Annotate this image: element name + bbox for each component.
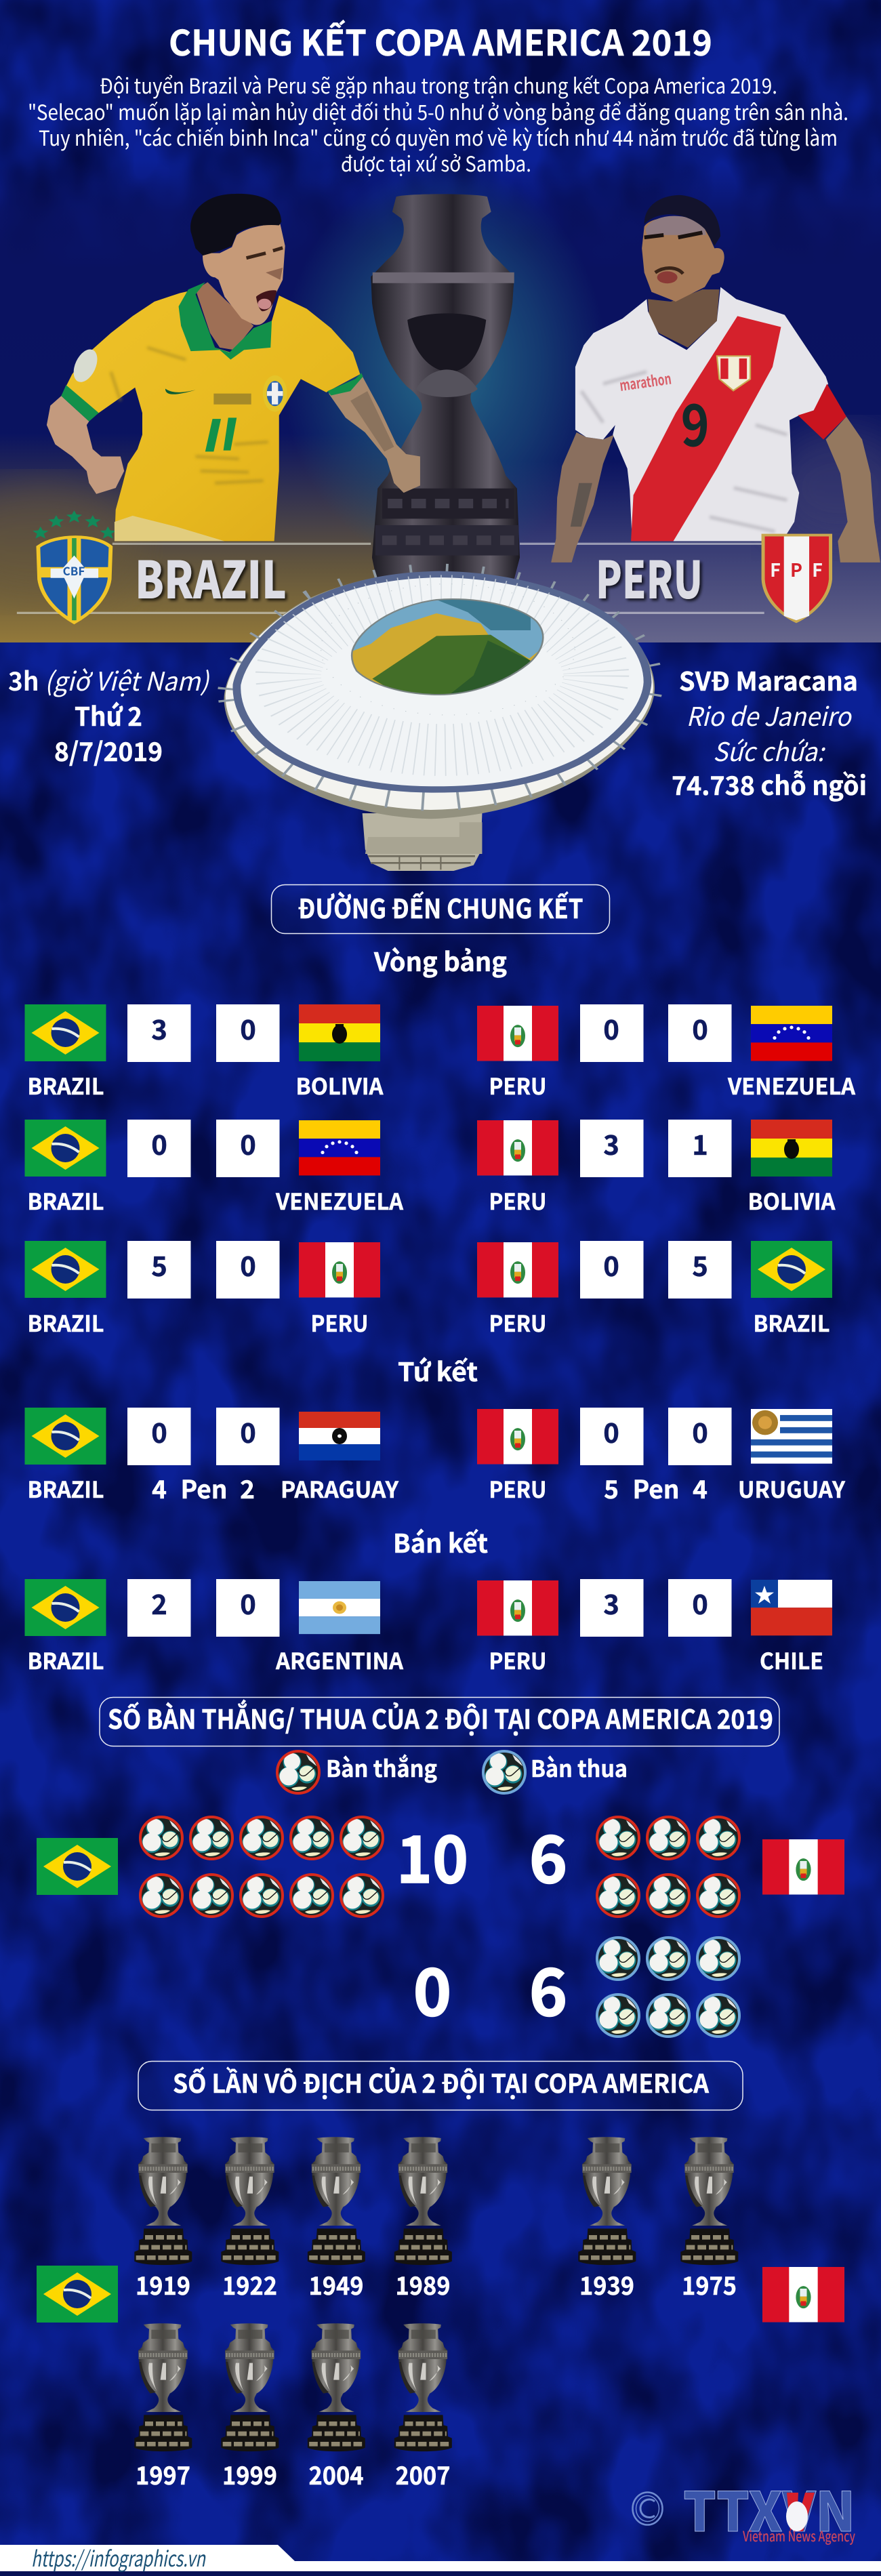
match: Peru 3-0 Chile: CHILE bbox=[760, 1643, 823, 1676]
match: Peru 3-1 Bolivia bbox=[477, 1120, 836, 1217]
match: Brazil 0-0 Venezuela: VENEZUELA bbox=[275, 1184, 404, 1217]
match: Brazil 0-0 Venezuela: 0 bbox=[240, 1124, 256, 1163]
open mouth bbox=[256, 290, 276, 311]
goals scored by Peru bbox=[597, 1817, 739, 1917]
trophy 1939: 1939 bbox=[579, 2266, 634, 2302]
match: Peru 0-0 Venezuela bbox=[477, 1004, 856, 1101]
match: Brazil 5-0 Peru: 0 bbox=[240, 1245, 256, 1284]
trophy 1922 bbox=[221, 2137, 279, 2302]
match: Peru 0-5 Brazil: BRAZIL bbox=[754, 1306, 829, 1338]
flag: Peru goals row bbox=[762, 1839, 844, 1894]
copyright mark bbox=[633, 2493, 663, 2525]
trophy 1949: 1949 bbox=[309, 2266, 363, 2302]
number: Brazil goals scored: 10 bbox=[396, 1807, 468, 1902]
icon: FPF crest bbox=[763, 535, 831, 621]
trophy 2004 bbox=[308, 2323, 365, 2492]
roof radial folds bbox=[288, 584, 596, 750]
footer url: https://infographics.vn bbox=[31, 2542, 206, 2573]
heading: group stage: Vòng bảng bbox=[373, 941, 507, 979]
match: Brazil 3-0 Bolivia: BRAZIL bbox=[27, 1069, 104, 1101]
trophy 1975: 1975 bbox=[682, 2266, 737, 2302]
match: Brazil 0-0 Paraguay, penalties 4-2: 2 bbox=[240, 1469, 255, 1506]
match: Brazil 0-0 Paraguay, penalties 4-2: 0 bbox=[240, 1412, 256, 1451]
flag: Brazil titles bbox=[37, 2266, 118, 2323]
match info: venue: Sức chứa: bbox=[713, 731, 825, 769]
match: Brazil 3-0 Bolivia: 3 bbox=[151, 1008, 167, 1048]
match: Brazil 0-0 Paraguay, penalties 4-2: 0 bbox=[151, 1412, 167, 1451]
trophy 1997: 1997 bbox=[136, 2455, 190, 2492]
match: Peru 0-0 Venezuela: VENEZUELA bbox=[727, 1069, 856, 1101]
stadium facade bbox=[226, 573, 653, 810]
match: Peru 0-5 Brazil: 0 bbox=[603, 1245, 619, 1284]
hero artwork: players and trophy bbox=[0, 0, 881, 642]
jersey bbox=[61, 291, 360, 541]
brows, mouth and moustache bbox=[644, 232, 702, 237]
crest letters: FPF bbox=[770, 556, 823, 582]
heading: semi-finals: Bán kết bbox=[393, 1523, 488, 1560]
legend: goals bbox=[277, 1751, 628, 1793]
goals scored by Brazil bbox=[140, 1817, 383, 1917]
match info: time and date: Thứ 2 bbox=[75, 696, 142, 733]
face bbox=[642, 218, 724, 302]
hero backdrop bbox=[0, 0, 881, 642]
neck bbox=[196, 282, 253, 350]
match: Peru 0-0 Venezuela: 0 bbox=[603, 1008, 619, 1048]
match info: venue: Rio de Janeiro bbox=[686, 696, 853, 733]
number: Brazil goals conceded: 0 bbox=[413, 1940, 451, 2035]
trophy 1919 bbox=[134, 2137, 192, 2302]
trophy 2004: 2004 bbox=[309, 2455, 363, 2492]
match: Brazil 0-0 Paraguay, penalties 4-2: 4 bbox=[152, 1469, 167, 1506]
match: Peru 0-5 Brazil: 5 bbox=[692, 1245, 708, 1284]
icon: Copa America trophy bbox=[371, 194, 520, 579]
TTXVN wordmark: TTXVN bbox=[683, 2469, 855, 2548]
player: Brazil number 11 bbox=[47, 194, 420, 541]
match: Peru 0-5 Brazil: PERU bbox=[489, 1306, 546, 1338]
collar bbox=[179, 282, 272, 360]
left arm bbox=[47, 396, 124, 494]
match: Peru 3-1 Bolivia: 3 bbox=[603, 1124, 619, 1163]
right arm bbox=[329, 377, 420, 493]
match: Peru 3-0 Chile: PERU bbox=[489, 1643, 546, 1676]
central glow behind the trophy bbox=[281, 163, 607, 569]
icon: five green stars bbox=[33, 510, 116, 539]
match: Peru 0-0 Uruguay, penalties 5-4: 0 bbox=[692, 1412, 708, 1451]
logo: TTXVN Vietnam News Agency bbox=[633, 2469, 855, 2548]
trophy 1989: 1989 bbox=[396, 2266, 450, 2302]
face bbox=[203, 224, 285, 325]
crest letters: FPF: F bbox=[770, 556, 781, 582]
match: Brazil 5-0 Peru: 5 bbox=[151, 1245, 167, 1284]
match: Brazil 0-0 Paraguay, penalties 4-2: BRAZIL bbox=[27, 1472, 104, 1505]
player: Peru number 9 bbox=[551, 195, 880, 563]
flag: Brazil goals row bbox=[37, 1838, 118, 1895]
captain armband bbox=[798, 384, 846, 440]
Peru name band bbox=[520, 544, 764, 613]
crest letters: CBF: CBF bbox=[63, 562, 85, 579]
number: Peru goals conceded: 6 bbox=[529, 1940, 567, 2035]
stadium concrete skirt bbox=[224, 571, 655, 819]
jersey number 11 bbox=[205, 417, 237, 451]
match: Peru 3-0 Chile bbox=[477, 1579, 832, 1676]
match info: time and date: 8/7/2019 bbox=[54, 731, 163, 769]
match info: venue: SVĐ Maracana bbox=[679, 661, 858, 698]
seating bowl bbox=[352, 600, 542, 694]
stadium illustration: Maracana bbox=[224, 571, 655, 871]
intro paragraph: được tại xứ sở Samba. bbox=[341, 147, 531, 178]
match: Peru 3-0 Chile: 3 bbox=[603, 1583, 619, 1622]
shorts bbox=[115, 516, 224, 541]
intro paragraph bbox=[28, 69, 848, 178]
match: Peru 3-1 Bolivia: BOLIVIA bbox=[748, 1184, 836, 1217]
match: Brazil 0-0 Venezuela: 0 bbox=[151, 1124, 167, 1163]
match: Brazil 0-0 Paraguay, penalties 4-2 bbox=[24, 1408, 399, 1506]
match: Brazil 2-0 Argentina: BRAZIL bbox=[27, 1643, 104, 1676]
hair bbox=[644, 195, 720, 246]
trophy 1997 bbox=[134, 2323, 192, 2492]
match: Peru 0-0 Uruguay, penalties 5-4 bbox=[477, 1408, 846, 1506]
match: Peru 0-0 Venezuela: PERU bbox=[489, 1069, 546, 1101]
jersey badge bbox=[263, 375, 287, 411]
match info: time and date bbox=[8, 661, 210, 769]
trophy 1975 bbox=[680, 2137, 738, 2302]
match: Peru 0-0 Uruguay, penalties 5-4: URUGUAY bbox=[738, 1472, 846, 1505]
trophy 2007 bbox=[394, 2323, 452, 2492]
match: Peru 0-0 Uruguay, penalties 5-4: 0 bbox=[603, 1412, 619, 1451]
hair bbox=[190, 194, 281, 255]
grey smoke on the Peru side bbox=[447, 427, 881, 642]
match: Brazil 3-0 Bolivia: 0 bbox=[240, 1008, 256, 1048]
icon: CBF crest bbox=[38, 537, 110, 622]
Brazil name band bbox=[17, 510, 371, 622]
match: Peru 0-0 Uruguay, penalties 5-4: PERU bbox=[489, 1472, 546, 1505]
match info: time and date: 3h (giờ Việt Nam) bbox=[8, 661, 210, 698]
match: Brazil 2-0 Argentina bbox=[24, 1579, 404, 1676]
neck bbox=[648, 289, 719, 348]
match: Brazil 3-0 Bolivia: BOLIVIA bbox=[295, 1069, 384, 1101]
chest emblem bbox=[213, 394, 251, 405]
match: Peru 3-0 Chile: 0 bbox=[692, 1583, 708, 1622]
stadium annex bbox=[363, 813, 482, 871]
match: Peru 0-0 Uruguay, penalties 5-4: 4 bbox=[693, 1469, 708, 1506]
match: Brazil 3-0 Bolivia bbox=[24, 1004, 384, 1101]
footer band bbox=[0, 2542, 881, 2576]
match: Brazil 2-0 Argentina: 0 bbox=[240, 1583, 256, 1622]
hero label: BRAZIL: BRAZIL bbox=[135, 539, 287, 613]
match: Peru 3-1 Bolivia: 1 bbox=[692, 1124, 708, 1163]
facade columns bbox=[230, 574, 651, 801]
legend: goals: Bàn thua bbox=[531, 1751, 628, 1784]
match: Brazil 5-0 Peru bbox=[24, 1241, 380, 1338]
heading: road to the final: ĐƯỜNG ĐẾN CHUNG KẾT bbox=[298, 888, 583, 926]
number: Peru goals scored: 6 bbox=[529, 1807, 567, 1902]
jersey number 9: 9 bbox=[681, 380, 710, 464]
blue upper seats bbox=[351, 600, 545, 659]
match: Peru 0-0 Venezuela: 0 bbox=[692, 1008, 708, 1048]
red sash bbox=[631, 316, 781, 541]
jersey shadows bbox=[581, 372, 787, 531]
match: Peru 3-1 Bolivia: PERU bbox=[489, 1184, 546, 1217]
match info: venue: 74.738 chỗ ngồi bbox=[672, 765, 867, 802]
match: Brazil 5-0 Peru: PERU bbox=[310, 1306, 369, 1338]
heading: goals scored and conceded: SỐ BÀN THẮNG/ THUA CỦA 2 ĐỘI TẠI COPA AMERICA 2019 bbox=[108, 1699, 773, 1737]
Peru titles bbox=[578, 2137, 738, 2302]
jersey crest bbox=[717, 356, 750, 390]
match info: venue bbox=[672, 661, 867, 802]
left arm bbox=[551, 432, 614, 563]
legend: goals: Bàn thắng bbox=[326, 1751, 437, 1784]
roof edge panels and white roof bbox=[237, 574, 648, 790]
trophy 1999: 1999 bbox=[222, 2455, 277, 2492]
red V and white globe bbox=[786, 2493, 815, 2531]
intro paragraph: Đội tuyển Brazil và Peru sẽ gặp nhau trong trận chung kết Copa America 2019. bbox=[100, 69, 777, 100]
trophy 1939 bbox=[578, 2137, 636, 2302]
trophy 2007: 2007 bbox=[396, 2455, 450, 2492]
match: Peru 0-0 Uruguay, penalties 5-4: 5 bbox=[604, 1469, 619, 1506]
goals conceded by Peru bbox=[597, 1938, 739, 2037]
gold smoke on the Brazil side bbox=[0, 434, 434, 642]
trophy 1919: 1919 bbox=[136, 2266, 190, 2302]
trophy 1989 bbox=[394, 2137, 452, 2302]
Brazil titles bbox=[134, 2137, 452, 2492]
match: Brazil 5-0 Peru: BRAZIL bbox=[27, 1306, 104, 1338]
match: Brazil 0-0 Paraguay, penalties 4-2: Pen bbox=[180, 1469, 228, 1506]
trophy 1949 bbox=[308, 2137, 365, 2302]
jersey shading bbox=[111, 348, 268, 483]
crest letters: FPF: F bbox=[812, 556, 823, 582]
heading: quarter-finals: Tứ kết bbox=[398, 1351, 478, 1389]
brows and nose shadow bbox=[247, 248, 283, 258]
jersey bbox=[575, 287, 828, 541]
match: Brazil 0-0 Venezuela bbox=[24, 1120, 404, 1217]
match: Peru 0-0 Uruguay, penalties 5-4: Pen bbox=[633, 1469, 679, 1506]
heading: championship titles: SỐ LẦN VÔ ĐỊCH CỦA 2 ĐỘI TẠI COPA AMERICA bbox=[173, 2063, 710, 2100]
swoosh bbox=[165, 389, 196, 394]
title: CHUNG KẾT COPA AMERICA 2019 bbox=[169, 15, 712, 66]
right arm bbox=[826, 417, 880, 563]
trophy 1922: 1922 bbox=[222, 2266, 277, 2302]
sponsor text: marathon bbox=[618, 367, 672, 396]
sleeve patch bbox=[69, 346, 102, 386]
match: Brazil 0-0 Paraguay, penalties 4-2: PARAGUAY bbox=[281, 1472, 399, 1505]
flag: Peru titles bbox=[762, 2267, 844, 2322]
football pitch bbox=[372, 635, 531, 696]
trophy 1999 bbox=[221, 2323, 279, 2492]
match: Brazil 2-0 Argentina: ARGENTINA bbox=[275, 1643, 404, 1676]
match: Brazil 2-0 Argentina: 2 bbox=[151, 1583, 167, 1622]
match: Brazil 0-0 Venezuela: BRAZIL bbox=[27, 1184, 104, 1217]
match: Peru 0-5 Brazil bbox=[477, 1241, 832, 1338]
crest letters: FPF: P bbox=[790, 556, 802, 582]
hero label: PERU: PERU bbox=[596, 539, 703, 613]
